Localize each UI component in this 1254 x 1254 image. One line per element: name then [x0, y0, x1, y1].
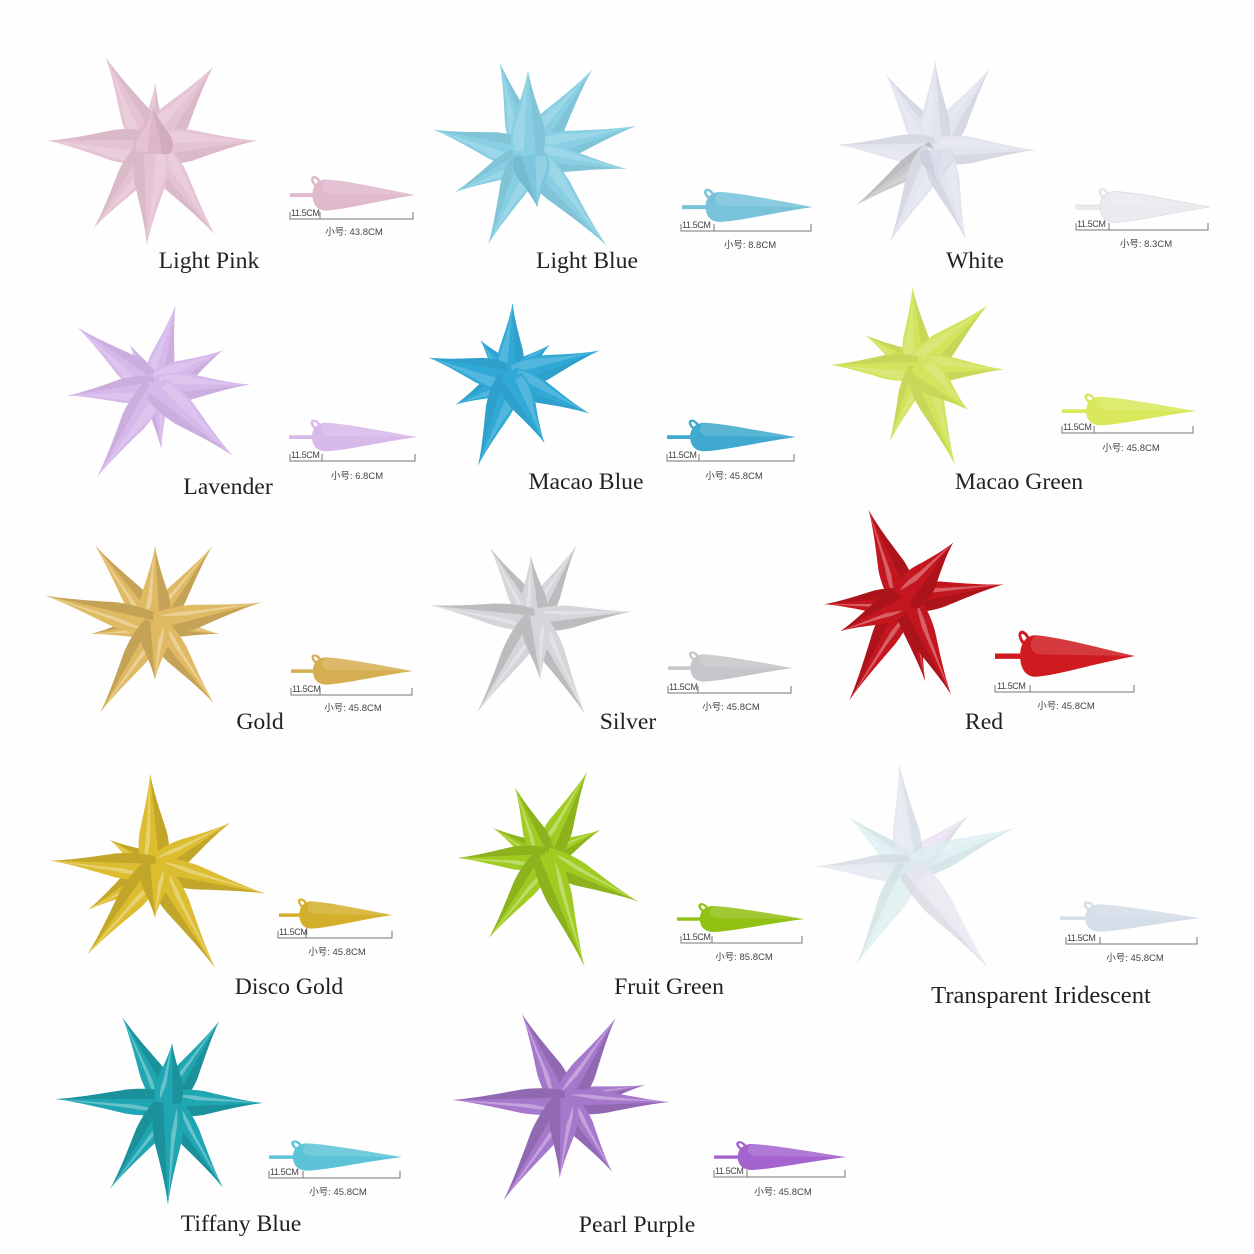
size ruler: 小号: 45.8CM	[1037, 701, 1095, 712]
size ruler: 11.5CM	[1063, 422, 1091, 432]
size ruler: 11.5CM	[1077, 219, 1105, 229]
panel: Tiffany Blue	[55, 1011, 402, 1237]
label: Fruit Green	[614, 974, 724, 1000]
size ruler: 11.5CM	[682, 932, 710, 942]
label: Light Blue	[536, 248, 638, 274]
size ruler	[1066, 933, 1197, 964]
icon: Light Blue star balloon	[429, 58, 640, 256]
size ruler: 11.5CM	[669, 682, 697, 692]
panel: Light Pink	[46, 50, 415, 274]
size ruler: 11.5CM	[291, 208, 319, 218]
icon: Transparent Iridescent single spike	[1060, 901, 1200, 932]
panel: Lavender	[66, 302, 417, 500]
icon: Transparent Iridescent star balloon	[815, 761, 1021, 978]
icon: Lavender single spike	[289, 419, 417, 451]
icon: Lavender star balloon	[66, 302, 250, 485]
icon: Light Blue single spike	[682, 189, 813, 222]
size ruler	[667, 450, 794, 482]
panel: Light Blue	[429, 58, 813, 274]
size ruler	[278, 927, 392, 958]
icon: Fruit Green single spike	[677, 903, 804, 932]
icon: Disco Gold single spike	[279, 898, 392, 929]
size ruler: 小号: 45.8CM	[1102, 443, 1160, 454]
size ruler: 11.5CM	[682, 220, 710, 230]
size ruler	[681, 220, 811, 251]
panel: Gold	[41, 538, 413, 735]
label: Pearl Purple	[579, 1212, 695, 1238]
size ruler: 小号: 45.8CM	[324, 703, 382, 714]
size ruler	[714, 1166, 845, 1198]
label: White	[946, 248, 1004, 274]
label: Gold	[236, 709, 284, 735]
size ruler: 小号: 6.8CM	[331, 471, 383, 482]
icon: Fruit Green star balloon	[457, 765, 644, 972]
icon: Silver star balloon	[428, 540, 633, 721]
label: Red	[965, 709, 1003, 735]
size ruler: 小号: 45.8CM	[309, 1187, 367, 1198]
size ruler: 11.5CM	[1067, 933, 1095, 943]
size ruler: 11.5CM	[997, 681, 1025, 691]
size ruler: 11.5CM	[291, 450, 319, 460]
label: Transparent Iridescent	[931, 982, 1151, 1009]
icon: Gold star balloon	[41, 538, 264, 719]
size ruler: 小号: 45.8CM	[754, 1187, 812, 1198]
size ruler: 小号: 45.8CM	[705, 471, 763, 482]
size ruler	[1062, 422, 1193, 454]
size ruler	[290, 450, 415, 482]
label: Lavender	[183, 474, 273, 500]
size ruler: 11.5CM	[279, 927, 307, 937]
icon: Macao Blue star balloon	[425, 303, 604, 471]
size ruler	[995, 681, 1134, 712]
icon: White single spike	[1076, 188, 1210, 223]
panel: Macao Green	[830, 286, 1196, 495]
icon: White star balloon	[836, 60, 1036, 249]
icon: Tiffany Blue star balloon	[55, 1011, 263, 1205]
size ruler	[290, 208, 413, 238]
icon: Macao Blue single spike	[667, 419, 796, 451]
label: Disco Gold	[235, 974, 343, 1000]
icon: Light Pink single spike	[290, 176, 415, 211]
icon: Red star balloon	[823, 504, 1006, 708]
label: Macao Blue	[528, 469, 644, 495]
icon: Gold single spike	[291, 654, 413, 685]
size ruler	[1076, 219, 1208, 250]
size ruler: 11.5CM	[668, 450, 696, 460]
size ruler: 小号: 43.8CM	[325, 227, 383, 238]
label: Silver	[600, 709, 656, 735]
icon: Pearl Purple star balloon	[452, 1008, 670, 1208]
panel: White	[836, 60, 1210, 274]
panel: Silver	[428, 540, 793, 735]
size ruler: 小号: 85.8CM	[715, 952, 773, 963]
label: Light Pink	[159, 248, 259, 274]
panel: Red	[823, 504, 1135, 735]
size ruler: 小号: 45.8CM	[308, 947, 366, 958]
icon: Silver single spike	[668, 651, 793, 682]
icon: Pearl Purple single spike	[714, 1141, 846, 1170]
panel: Pearl Purple	[452, 1008, 846, 1238]
icon: Red single spike	[995, 630, 1135, 677]
size ruler: 小号: 45.8CM	[1106, 953, 1164, 964]
panel: Macao Blue	[425, 303, 796, 495]
label: Macao Green	[955, 469, 1083, 495]
panel: Fruit Green	[457, 765, 804, 1000]
size ruler	[681, 932, 802, 963]
size ruler	[269, 1167, 400, 1198]
icon: Disco Gold star balloon	[49, 772, 269, 976]
size ruler: 11.5CM	[270, 1167, 298, 1177]
panel: Transparent Iridescent	[815, 761, 1200, 1009]
size ruler: 小号: 8.3CM	[1120, 239, 1172, 250]
label: Tiffany Blue	[181, 1211, 301, 1237]
panel: Disco Gold	[49, 772, 392, 1000]
icon: Macao Green star balloon	[830, 286, 1004, 470]
icon: Light Pink star balloon	[46, 50, 259, 246]
size ruler	[291, 684, 412, 714]
size ruler: 11.5CM	[715, 1166, 743, 1176]
icon: Tiffany Blue single spike	[269, 1140, 402, 1171]
size ruler: 小号: 8.8CM	[724, 240, 776, 251]
size ruler: 小号: 45.8CM	[702, 702, 760, 713]
size ruler	[668, 682, 791, 713]
size ruler: 11.5CM	[292, 684, 320, 694]
icon: Macao Green single spike	[1062, 393, 1196, 425]
